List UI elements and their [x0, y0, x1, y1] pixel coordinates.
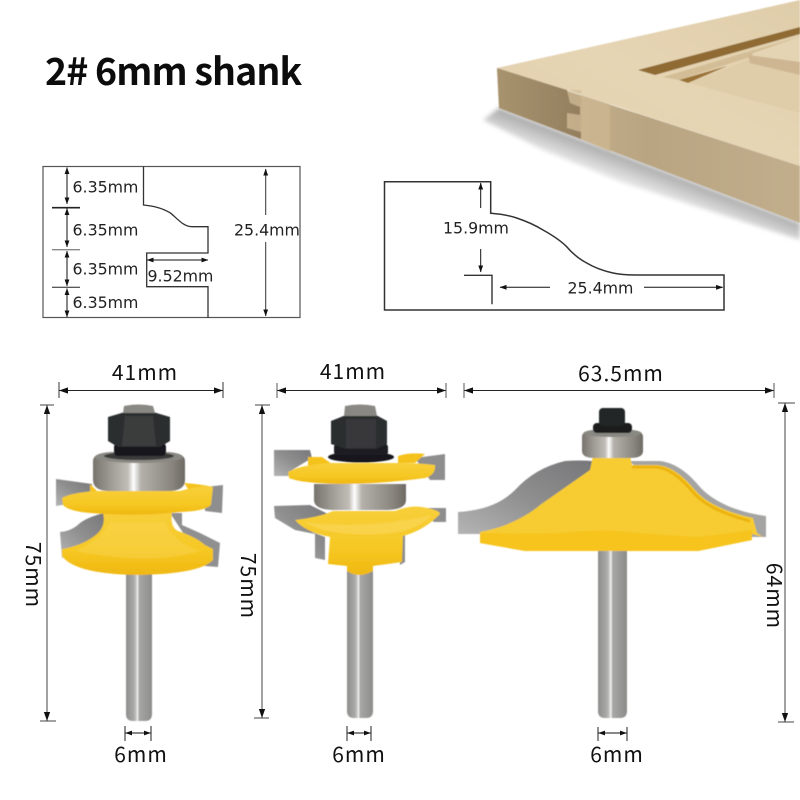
bit 1 width 41mm: 41mm [112, 357, 178, 387]
height dimensions [19, 403, 795, 722]
router bit 1 [56, 404, 223, 721]
carbide blade left [458, 460, 592, 534]
bit 2 width 41mm: 41mm [320, 356, 386, 386]
retaining bolt [593, 423, 632, 433]
6.35mm labels: 6.35mm [72, 260, 138, 278]
wood door corner joint illustration [483, 0, 800, 240]
shank [598, 545, 627, 718]
carbide blades [56, 479, 92, 506]
panel profile outline [384, 182, 724, 310]
bit 2 height 75mm: 75mm [234, 553, 264, 619]
bit 3 width 63.5mm [464, 358, 774, 398]
bit 1 diameter 6mm: 6mm [114, 739, 168, 769]
profile diagram: raised panel [384, 182, 724, 310]
carbide blades [274, 450, 312, 476]
bearing [93, 452, 185, 491]
yellow body [62, 513, 213, 575]
bearing [582, 430, 643, 458]
bit 2 diameter 6mm: 6mm [332, 739, 386, 769]
25.4mm dimension: 25.4mm [568, 278, 633, 298]
bit 1 width 41mm [59, 357, 223, 398]
bit 3 height 64mm [760, 403, 795, 722]
router bit 2 [274, 404, 446, 718]
router bit 3 [458, 408, 766, 718]
shank [347, 565, 373, 718]
bit 1 diameter 6mm [114, 726, 168, 769]
bit 2 height 75mm [234, 405, 270, 718]
yellow cutter body [480, 456, 763, 551]
bit 3 diameter 6mm: 6mm [590, 739, 644, 769]
section ticks [52, 207, 80, 209]
15.9mm dimension [443, 183, 509, 272]
lower yellow wing and body [295, 506, 440, 575]
carbide blade right [628, 461, 766, 537]
bit 3 width 63.5mm: 63.5mm [578, 358, 664, 388]
6.35mm labels: 6.35mm [72, 220, 138, 240]
bit 2 width 41mm [277, 356, 446, 398]
bit 1 height 75mm: 75mm [19, 542, 49, 608]
15.9mm dimension: 15.9mm [443, 218, 509, 238]
9.52mm dimension: 9.52mm [148, 266, 213, 286]
bearing [314, 484, 406, 510]
6.35mm labels: 6.35mm [72, 178, 138, 196]
profile diagram: door rail [43, 166, 300, 318]
shank [126, 570, 152, 721]
yellow rim [632, 467, 750, 521]
6.35mm labels [72, 178, 138, 312]
retaining nut [114, 443, 166, 456]
width dimensions [59, 356, 774, 398]
retaining nut [328, 452, 394, 462]
shank diameter dimensions [114, 726, 644, 769]
upper yellow wing [308, 453, 425, 467]
6.35mm dimension arrows [66, 168, 68, 317]
25.4mm dimension: 25.4mm [234, 220, 300, 240]
cutter profile outline [144, 166, 208, 318]
bit 2 diameter 6mm [332, 726, 386, 769]
6.35mm labels: 6.35mm [72, 293, 138, 312]
title: 2# 6mm shank [45, 41, 303, 96]
bit 3 height 64mm: 64mm [760, 563, 790, 629]
notch [464, 275, 492, 304]
lower facet [480, 530, 752, 551]
bit 1 height 75mm [19, 405, 56, 721]
